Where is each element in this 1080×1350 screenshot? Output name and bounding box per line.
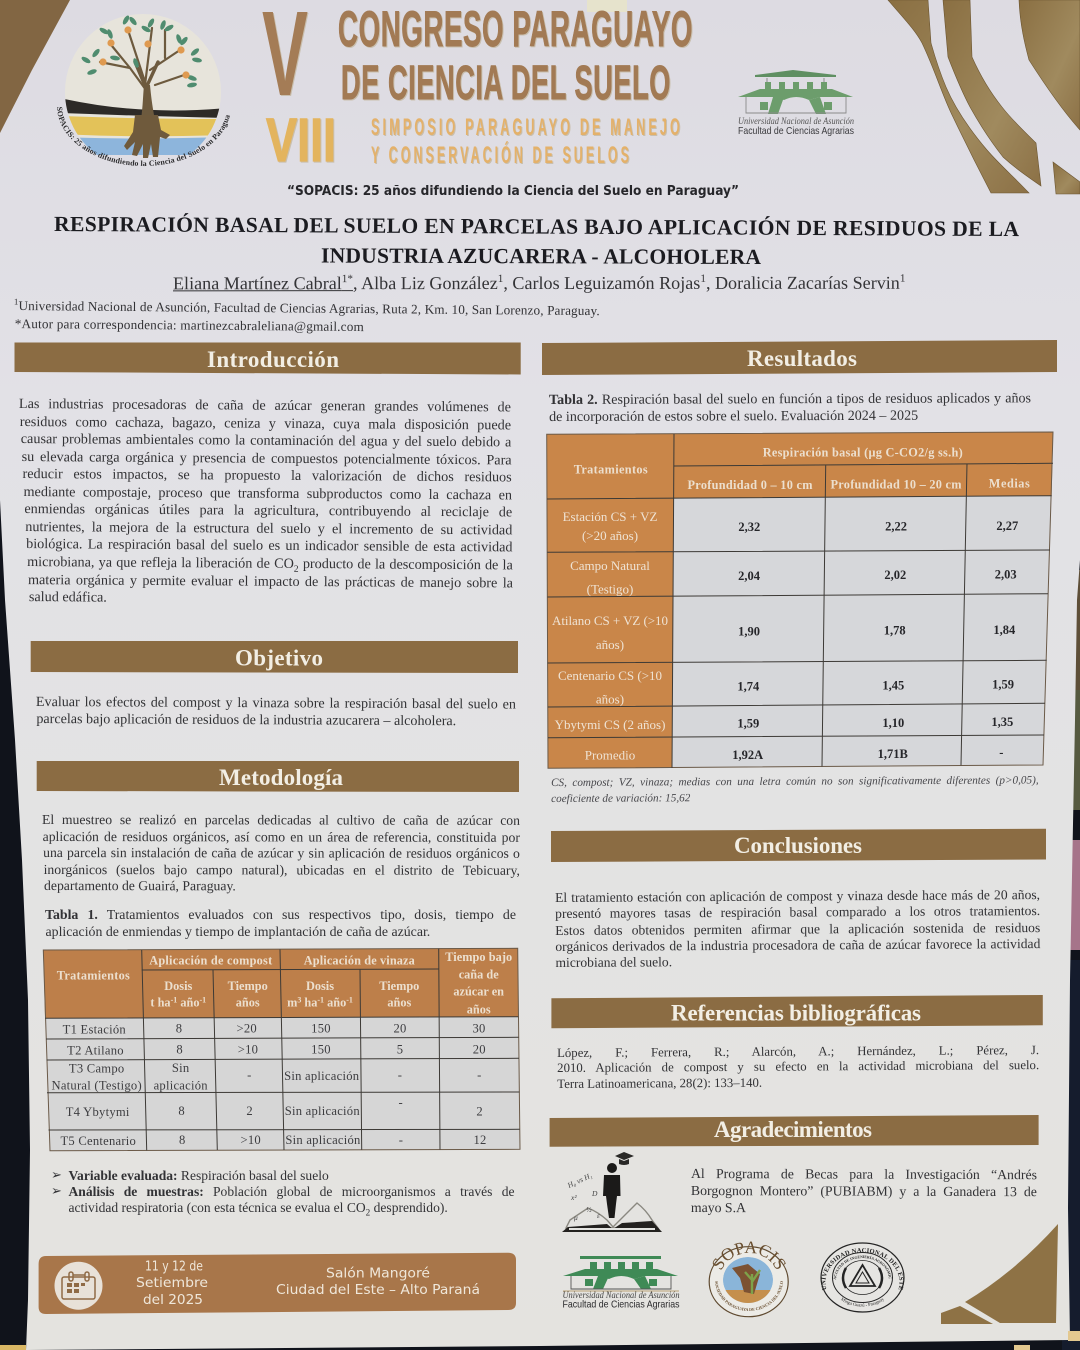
table 2: basal respiration: 1,90 <box>738 625 760 639</box>
table 1: treatments: Aplicación de compost <box>149 954 273 968</box>
formula marks: x² <box>570 1193 577 1202</box>
table 1: treatments: >20 <box>236 1021 257 1035</box>
table 1: treatments: 2 <box>246 1104 253 1118</box>
date and venue banner: Setiembre <box>136 1275 208 1291</box>
table 1: treatments: - <box>398 1096 403 1110</box>
event title lockup <box>262 0 693 174</box>
table 1: treatments: -1 <box>171 996 177 1005</box>
table 2: basal respiration: Promedio <box>585 747 635 762</box>
introduction text: reducir estos impactos, se ha propuesto la valorización de dichos residuos <box>22 466 512 486</box>
table 1: treatments: 150 <box>311 1043 331 1057</box>
table 2: basal respiration: 2,02 <box>884 568 906 582</box>
table 1: treatments: Dosis <box>306 979 334 993</box>
conclusions text: orgánicos derivados de la industria procesadora de caña de azúcar favorece la actividad <box>555 935 1040 953</box>
methodology text: una parcela sin instalación de caña de azúcar y sin aplicación de residuos orgánicos o <box>43 845 520 861</box>
evaluated variables list: Análisis de muestras: Población global de microorganismos a través de <box>68 1184 515 1199</box>
table 1: treatments: Dosis <box>164 979 193 993</box>
title: RESPIRACIÓN BASAL DEL SUELO EN PARCELAS BAJO APLICACIÓN DE RESIDUOS DE LA <box>54 212 1019 241</box>
table 1 caption <box>45 907 516 939</box>
logo: Facultad de Ciencias Agrarias bottom <box>562 1256 680 1310</box>
table 2: basal respiration: Medias <box>989 477 1030 491</box>
formula marks: μ <box>574 1213 578 1222</box>
section header: Metodología: Metodología <box>219 765 344 790</box>
table 1: treatments: caña de <box>459 967 499 981</box>
table 1: treatments: ha <box>301 996 317 1010</box>
table 2 caption: de incorporación de estos sobre el suelo. Evaluación 2024 – 2025 <box>549 408 918 425</box>
event title lockup: VIII <box>266 106 336 174</box>
table 1: treatments: Natural (Testigo) <box>51 1078 142 1092</box>
logo: SOPACIS: SOPACIS <box>712 1242 786 1270</box>
table 2: basal respiration: - <box>999 746 1003 760</box>
reference text: 2010. Aplicación de compost y su efecto en la actividad microbiana del suelo. <box>557 1058 1039 1075</box>
table 2: basal respiration: 1,74 <box>737 680 760 694</box>
logo: SOPACIS: SOCIEDAD PARAGUAYA DE CIENCIA DEL SUELO <box>715 1281 783 1311</box>
table 1: treatments: 30 <box>472 1021 486 1035</box>
table 2: basal respiration: Atilano CS + VZ (>10 <box>552 613 668 628</box>
section header: Introducción: Introducción <box>207 347 339 372</box>
conclusions text <box>555 887 1040 969</box>
table 1: treatments: 2 <box>476 1105 483 1119</box>
table 1 header text: Tratamientos <box>57 968 130 982</box>
oranges <box>99 26 190 79</box>
corner: top left <box>0 0 70 133</box>
table 2: basal respiration: Ybytymi CS (2 años) <box>555 717 665 732</box>
table 2: basal respiration: 1,10 <box>882 716 904 730</box>
logo: scholar on book <box>562 1152 662 1232</box>
logo: SOPACIS <box>708 1242 789 1318</box>
reference text: Terra Latinoamericana, 28(2): 133–140. <box>557 1076 762 1091</box>
table 2: basal respiration: Centenario CS (>10 <box>558 668 662 683</box>
table 1: treatments: 150 <box>311 1021 331 1035</box>
table 1: treatments: - <box>247 1068 252 1082</box>
table 2: basal respiration: Campo Natural <box>570 558 650 573</box>
conclusions text: El tratamiento estación con aplicación de compost y vinaza desde hace más de 20 años, <box>555 887 1040 904</box>
table 1: treatments: -1 <box>346 996 353 1005</box>
soil bands <box>65 99 220 155</box>
methodology text: aplicación de residuos orgánicos, así como en un área de referencia, constituida por <box>43 829 520 844</box>
methodology text: departamento de Guairá, Paraguay. <box>44 878 236 894</box>
introduction text: su elevada carga orgánica y presencia de compuestos potencialmente tóxicos. Para <box>22 449 512 468</box>
graduation cap <box>615 1152 634 1165</box>
date and venue banner <box>39 1253 516 1314</box>
table 1: treatments: años <box>236 996 260 1010</box>
event title lockup: Y CONSERVACIÓN DE SUELOS <box>371 141 632 169</box>
conclusions text: presentó mayores tasas de respiración basal comparado a los otros tratamientos. <box>555 903 1040 921</box>
table 1: treatments: 8 <box>178 1104 185 1118</box>
event title lockup: DE CIENCIA DEL SUELO <box>341 57 671 110</box>
logo: Facultad de Ciencias Agrarias bottom: Facultad de Ciencias Agrarias <box>562 1298 680 1310</box>
reference text: López, F.; Ferrera, R.; Alarcón, A.; Hernández, L.; Pérez, J. <box>557 1043 1039 1060</box>
table 2 caption: Tabla 2. Respiración basal del suelo en función a tipos de residuos aplicados y años <box>549 390 1031 407</box>
table 2 caption <box>549 390 1031 425</box>
table 1: treatments: T2 Atilano <box>67 1043 124 1057</box>
scholar figure <box>603 1163 620 1218</box>
table 2: basal respiration: 1,35 <box>991 715 1013 729</box>
table 1: treatments <box>43 948 520 1151</box>
roots hand <box>124 115 170 158</box>
table 2: basal respiration: (Testigo) <box>587 581 633 596</box>
evaluated variables list: actividad respiratoria (con esta técnica se evalua el CO2 desprendido). <box>68 1200 448 1218</box>
objective text: parcelas bajo aplicación de residuos de la industria azucarera – alcoholera. <box>36 711 456 729</box>
table 1: treatments: azúcar en <box>453 985 504 999</box>
evaluated variables list: ➢ <box>51 1168 62 1182</box>
conclusions text: microbiana del suelo. <box>555 954 672 969</box>
evaluated variables list: ➢ <box>51 1184 62 1199</box>
tree <box>141 85 155 120</box>
table 1: treatments: 20 <box>473 1043 486 1057</box>
table 2: basal respiration: 1,84 <box>993 623 1016 637</box>
table 1: treatments: Sin <box>172 1061 190 1075</box>
table 2: basal respiration: 1,59 <box>737 717 759 731</box>
table 1: treatments: - <box>477 1068 482 1082</box>
evaluated variables list <box>51 1168 515 1218</box>
introduction text: salud edáfica. <box>29 589 107 606</box>
formula marks <box>565 1170 600 1222</box>
date and venue banner: del 2025 <box>143 1292 203 1308</box>
table 1: treatments: 12 <box>473 1133 487 1147</box>
reference text <box>557 1043 1039 1091</box>
table 1: treatments: - <box>398 1068 402 1082</box>
table 1: treatments: -1 <box>317 996 324 1005</box>
methodology text <box>42 812 520 894</box>
introduction text: nutrientes, la mejora de la estructura del suelo y el incremento de su actividad <box>25 519 512 538</box>
table 2 note: CS, compost; VZ, vinaza; medias con una letra común no son significativamente diferentes (p>0,05), <box>551 774 1039 788</box>
methodology text: El muestreo se realizó en parcelas dedicadas al cultivo de caña de azúcar con <box>42 812 520 828</box>
introduction text: materia orgánica y permite evaluar el impacto de las prácticas de manejo sobre la <box>28 572 513 591</box>
table 2: basal respiration: Profundidad 0 – 10 cm <box>688 478 813 492</box>
table 1: treatments: Tiempo bajo <box>445 950 512 964</box>
table 1: treatments: Tiempo <box>379 979 419 993</box>
table 2: basal respiration: 1,78 <box>884 624 906 638</box>
section header: Objetivo <box>31 641 518 673</box>
introduction text: residuos como cachaza, bagazo, ceniza y vinaza, cuya mala disposición puede <box>20 414 511 433</box>
event title lockup: SIMPOSIO PARAGUAYO DE MANEJO <box>371 114 683 141</box>
introduction text: biológica. La respiración basal del suelo es un indicador sensible de esta actividad <box>26 537 513 556</box>
table 1 caption: aplicación de enmiendas y tiempo de implantación de caña de azúcar. <box>46 924 430 939</box>
introduction text <box>19 396 513 606</box>
introduction text: mediante compostaje, proceso que transforma subproductos como la cachaza en <box>23 484 512 503</box>
section header: Resultados: Resultados <box>747 346 857 371</box>
date and venue banner: Salón Mangoré <box>326 1266 430 1282</box>
table 2 values: 2,32 <box>738 520 760 534</box>
tagline: “SOPACIS: 25 años difundiendo la Ciencia del Suelo en Paraguay” <box>287 184 739 199</box>
logo: Facultad de Ciencias Agrarias top: Facultad de Ciencias Agrarias <box>738 125 854 137</box>
table 1: treatments: Sin aplicación <box>284 1069 360 1083</box>
table 2: basal respiration: años) <box>596 692 624 707</box>
open book <box>566 1203 658 1228</box>
table 1: treatments: >10 <box>238 1043 258 1057</box>
table 1: treatments: T4 Ybytymi <box>66 1105 130 1119</box>
logo: Facultad de Ciencias Agrarias bottom: Universidad Nacional de Asunción <box>562 1291 680 1301</box>
table 2: basal respiration <box>547 432 1053 768</box>
table 1: treatments: años <box>467 1002 491 1016</box>
wooden dowel <box>1014 1331 1080 1350</box>
objective text <box>36 694 516 729</box>
table 2: basal respiration: 2,03 <box>995 567 1017 581</box>
date and venue banner: 11 y 12 de <box>145 1259 203 1275</box>
table 2: basal respiration: 1,59 <box>992 678 1014 692</box>
title <box>54 212 1019 269</box>
acknowledgements text: Borgognon Montero” (PUBIABM) y a la Ganadera 13 de <box>691 1182 1037 1199</box>
corner: bottom right <box>941 1224 1058 1324</box>
affiliation: *Autor para correspondencia: martinezcabraleliana@gmail.com <box>15 316 364 334</box>
table 1: treatments: Tiempo <box>228 979 268 993</box>
conclusions text: Estos datos obtenidos permiten afirmar que la aplicación sostenida de residuos <box>555 919 1040 937</box>
table 2: basal respiration: (>20 años) <box>582 528 638 543</box>
introduction text: causar problemas ambientales como la contaminación del agua y del suelo debido a <box>21 431 511 451</box>
table 2: basal respiration: 2,04 <box>738 569 761 583</box>
table 1: treatments: >10 <box>240 1133 261 1147</box>
table 2: basal respiration: 1,92A <box>732 748 763 762</box>
section header: Resultados <box>542 340 1057 375</box>
table 1: treatments: 8 <box>179 1133 186 1147</box>
table 2: basal respiration: Respiración basal (μg C-CO2/g ss.h) <box>763 446 963 460</box>
section header: Referencias bibliográficas <box>551 995 1043 1028</box>
logo: Universidad Nacional del Este: FACULTAD DE INGENIERÍA AGRONÓMICA <box>834 1256 892 1280</box>
logo: Facultad de Ciencias Agrarias top: Universidad Nacional de Asunción <box>738 117 854 127</box>
table 1: treatments: años <box>387 996 411 1010</box>
formula marks: H₀ vs H₁ <box>565 1170 594 1190</box>
section header: Conclusiones <box>551 829 1046 862</box>
objective text: Evaluar los efectos del compost y la vinaza sobre la respiración basal del suelo en <box>36 694 516 712</box>
methodology text: inorgánicos (suelos bajo campo natural), ubicadas en el distrito de Tebicuary, <box>44 862 520 878</box>
date and venue banner: Ciudad del Este – Alto Paraná <box>276 1282 480 1298</box>
table 2: basal respiration: Profundidad 10 – 20 cm <box>830 477 962 491</box>
table 1: treatments: 3 <box>297 996 301 1005</box>
table 1: treatments: 5 <box>397 1043 403 1057</box>
logo: Facultad de Ciencias Agrarias top <box>738 70 854 137</box>
acknowledgements text <box>691 1166 1037 1215</box>
introduction text: microbiana, ya que refleja la liberación de CO2 producto de la descomposición de la <box>27 554 513 575</box>
SOPACIS anniversary logo <box>57 14 230 166</box>
table 1: treatments: 8 <box>176 1043 183 1057</box>
table 2: basal respiration: años) <box>596 637 624 652</box>
section header: Conclusiones: Conclusiones <box>734 833 862 858</box>
table 1 rows: T1 Estación <box>63 1022 126 1036</box>
tape <box>587 0 627 12</box>
evaluated variables list: Variable evaluada: Respiración basal del suelo <box>68 1168 329 1182</box>
table 1: treatments: m <box>287 996 297 1010</box>
table 2: basal respiration: 2,22 <box>885 520 907 534</box>
table 2: basal respiration: 2,27 <box>996 519 1018 533</box>
section header: Referencias bibliográficas: Referencias bibliográficas <box>671 1000 921 1026</box>
logo: Universidad Nacional del Este: Minga Guazú - Paraguay <box>840 1297 884 1306</box>
formula marks: ½ <box>586 1205 592 1214</box>
table 1: treatments: T5 Centenario <box>60 1134 136 1148</box>
authors: Eliana Martínez Cabral1*, Alba Liz González1, Carlos Leguizamón Rojas1, Doralicia Zacarías Servin1 <box>173 273 905 293</box>
affiliation <box>14 297 600 334</box>
table 1: treatments: t ha <box>150 996 171 1010</box>
table 2 row labels: Estación CS + VZ <box>563 509 657 524</box>
table 1: treatments: aplicación <box>154 1078 208 1092</box>
table 1: treatments: Aplicación de vinaza <box>304 953 415 967</box>
introduction text: enmiendas orgánicas útiles para la agricultura, contribuyendo al reciclaje de <box>24 502 512 521</box>
introduction text: Las industrias procesadoras de caña de azúcar generan grandes volúmenes de <box>19 396 511 416</box>
formula marks: ε <box>597 1211 600 1220</box>
acknowledgements text: mayo S.A <box>691 1199 746 1215</box>
logo ring text <box>57 107 230 166</box>
affiliation: 1Universidad Nacional de Asunción, Facultad de Ciencias Agrarias, Ruta 2, Km. 10, San Lorenzo, Paraguay. <box>14 297 600 318</box>
table 1: treatments: -1 <box>199 996 206 1005</box>
table 1: treatments: - <box>399 1133 403 1147</box>
table 1 caption: Tabla 1. Tratamientos evaluados con sus respectivos tipo, dosis, tiempo de <box>45 907 516 922</box>
table 2: basal respiration: 1,45 <box>882 679 904 693</box>
section header: Agradecimientos: Agradecimientos <box>714 1117 872 1142</box>
table 2: basal respiration: 1,71B <box>878 747 908 761</box>
table 1: treatments: año <box>324 996 346 1010</box>
calendar icon <box>54 1262 102 1310</box>
table 2 note: coeficiente de variación: 15,62 <box>551 792 690 804</box>
table 1: treatments: 20 <box>393 1021 407 1035</box>
table 1: treatments: Sin aplicación <box>285 1133 361 1147</box>
acknowledgements text: Al Programa de Becas para la Investigación “Andrés <box>691 1166 1037 1182</box>
table 1: treatments: año <box>177 996 199 1010</box>
table 2 header text: Tratamientos <box>574 462 648 476</box>
event title lockup: CONGRESO PARAGUAYO <box>338 1 693 57</box>
formula marks: D <box>591 1189 598 1198</box>
table 1: treatments: 8 <box>176 1021 182 1035</box>
section header: Objetivo: Objetivo <box>235 646 323 670</box>
table 2 note <box>551 774 1039 804</box>
title: INDUSTRIA AZUCARERA - ALCOHOLERA <box>321 244 761 269</box>
table 1: treatments: T3 Campo <box>69 1062 124 1076</box>
logo: Universidad Nacional del Este: UNIVERSIDAD NACIONAL DEL ESTE <box>821 1248 904 1290</box>
section header: Agradecimientos <box>550 1115 1039 1147</box>
table 1: treatments: Sin aplicación <box>285 1104 360 1118</box>
section header: Introducción <box>14 342 521 374</box>
leaves <box>81 15 202 88</box>
section header: Metodología <box>37 761 519 792</box>
corner: top right swoosh <box>888 0 1080 194</box>
